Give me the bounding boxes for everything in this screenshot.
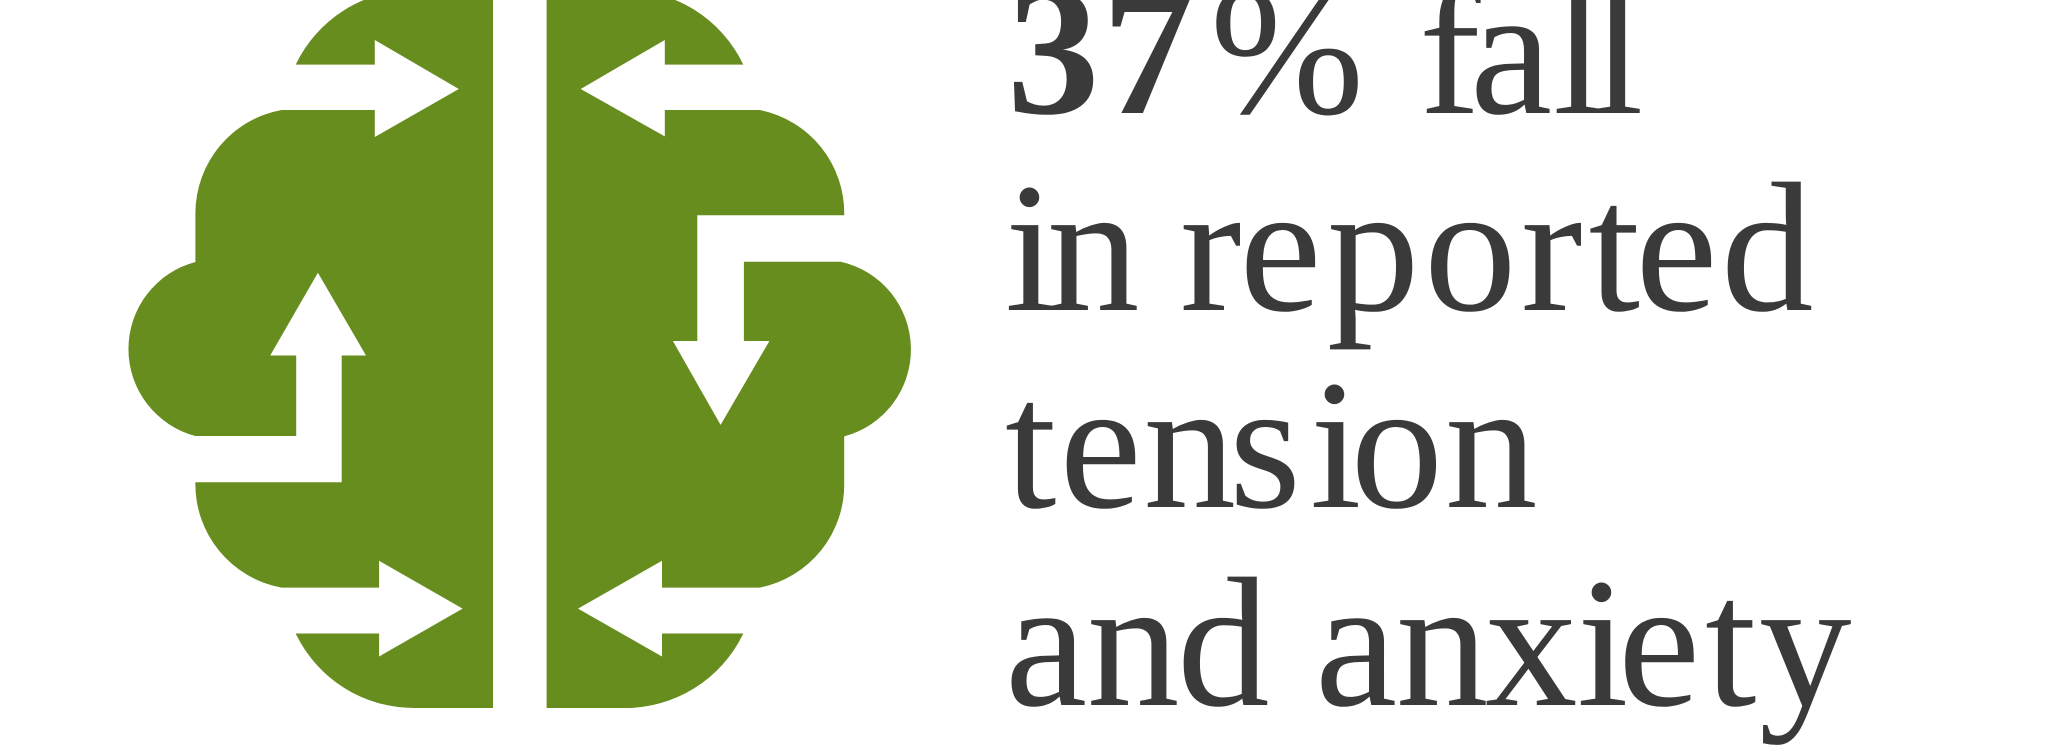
- line 1: 37% fall: [1007, 0, 1643, 154]
- line 4: and anxiety: and: [1005, 541, 1270, 746]
- line 2: in reported: in: [1005, 146, 1140, 351]
- line 4: and anxiety: anxiety: [1315, 541, 1852, 746]
- line 4: and anxiety: [1005, 541, 1852, 746]
- headline text: [1005, 0, 1852, 746]
- right hemisphere with arrow cut-outs: [547, 0, 911, 708]
- icon: brain with arrows: [128, 0, 911, 708]
- line 2: in reported: reported: [1180, 146, 1814, 351]
- line 3: tension: tension: [1005, 343, 1538, 548]
- left hemisphere with arrow cut-outs: [128, 0, 493, 708]
